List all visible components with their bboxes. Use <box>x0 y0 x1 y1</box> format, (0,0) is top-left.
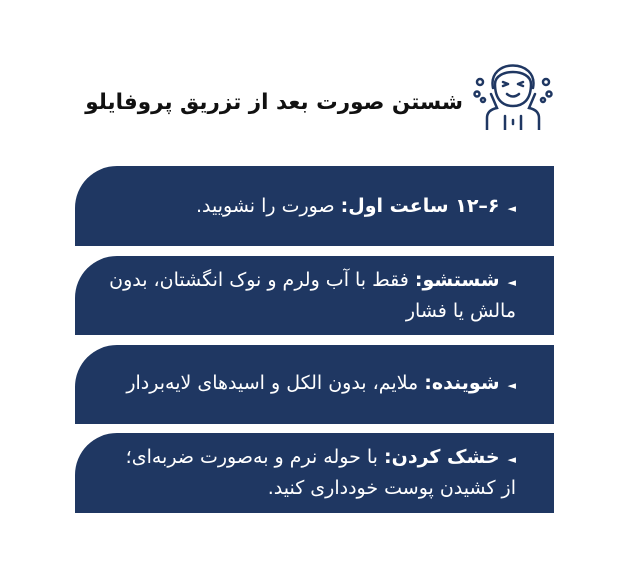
icon: face washing <box>473 64 553 130</box>
text: washing <box>109 268 516 322</box>
text: first hours: ◄۶–۱۲ ساعت اول: صورت را نشویید. <box>196 195 516 217</box>
panel: first hours <box>75 166 554 246</box>
text: drying <box>126 446 516 499</box>
text: washing: ◄شستشو: فقط با آب ولرم و نوک انگشتان، بدون <box>109 269 516 291</box>
text: drying: ◄خشک کردن: با حوله نرم و به‌صورت ضربه‌ای؛ <box>126 446 516 468</box>
panel: cleanser <box>75 345 554 424</box>
title: شستن صورت بعد از تزریق پروفایلو <box>85 90 463 115</box>
text: washing: مالش یا فشار <box>406 300 516 322</box>
panel: washing <box>75 256 554 335</box>
text: cleanser: ◄شوینده: ملایم، بدون الکل و اسیدهای لایه‌بردار <box>126 372 516 394</box>
panel: drying <box>75 433 554 513</box>
text: drying: از کشیدن پوست خودداری کنید. <box>268 477 516 499</box>
